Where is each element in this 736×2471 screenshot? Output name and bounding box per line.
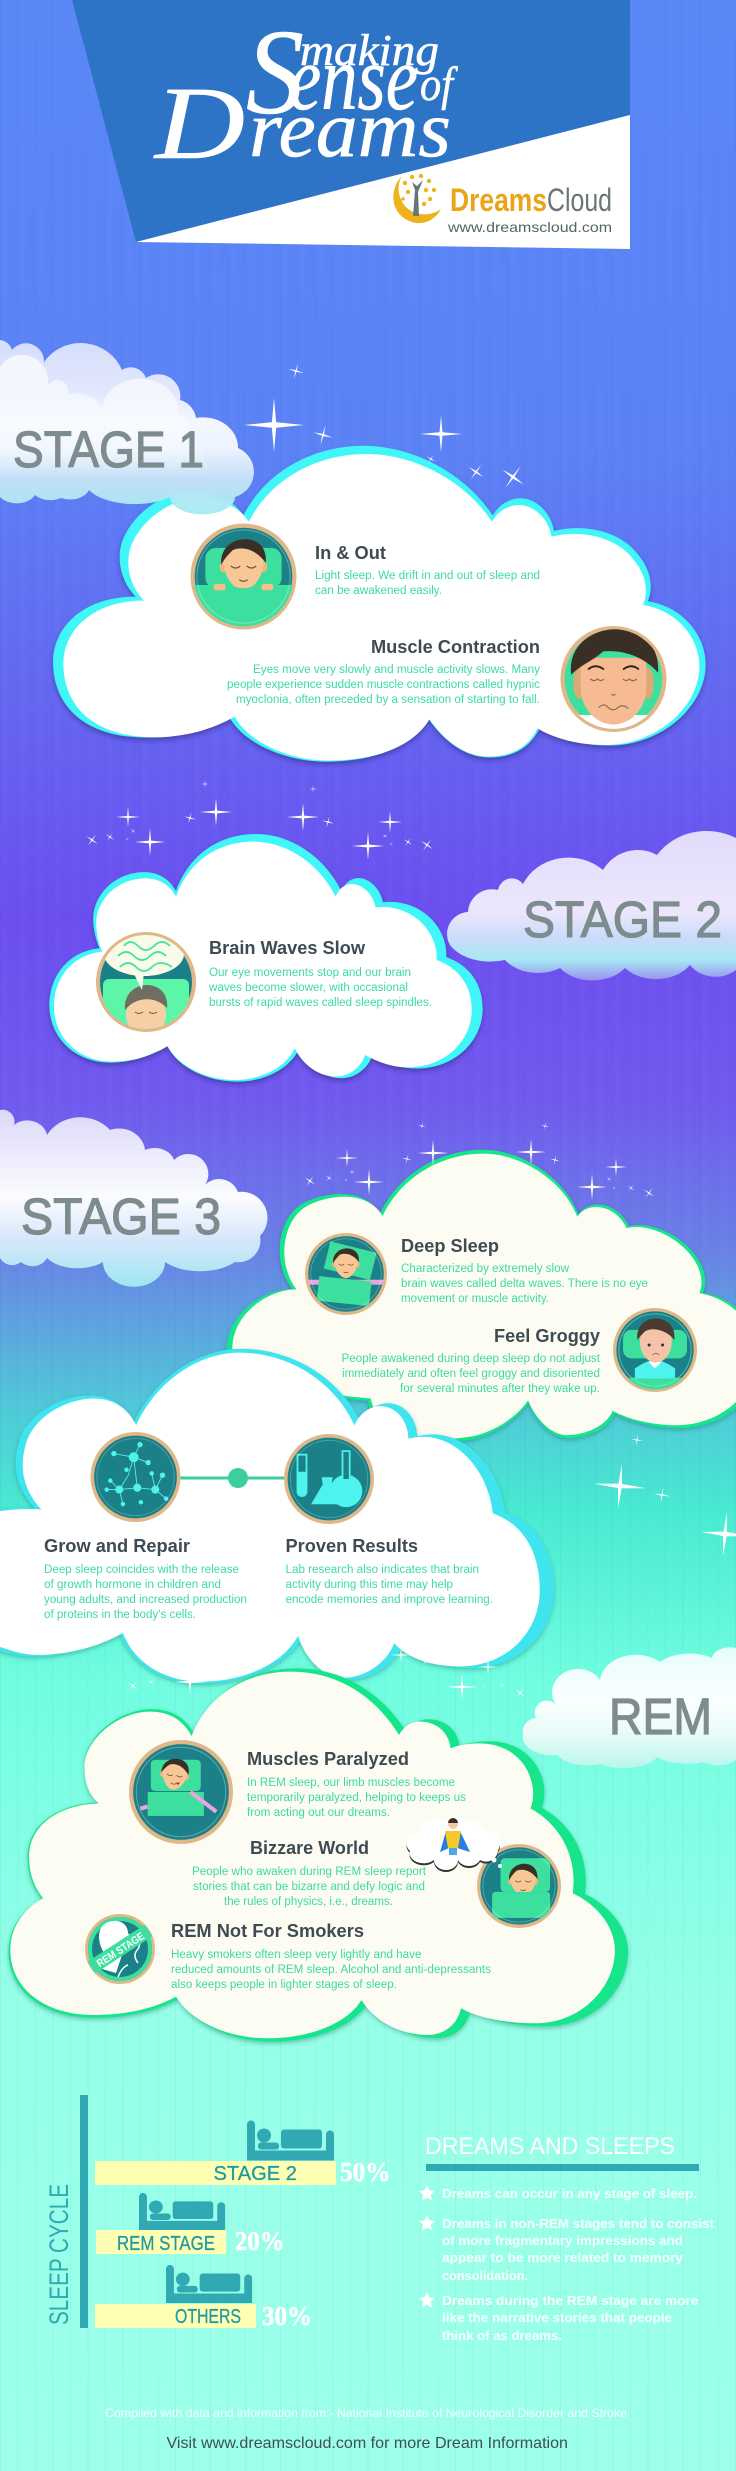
text: Muscle Contraction: myoclonia, often preceded by a sensation of starting to fall.: [236, 694, 540, 706]
text: REM Not For Smokers: Heavy smokers often sleep very lightly and have: [171, 1949, 422, 1961]
title: Making Sense of Dreams: making: [300, 26, 439, 75]
text: Feel Groggy: People awakened during deep sleep do not adjust: [342, 1353, 601, 1365]
chart: sleep cycle: [44, 2095, 390, 2331]
heading: STAGE 2: STAGE 2: [523, 891, 722, 948]
text: Bizzare World: stories that can be bizarre and defy logic and: [193, 1881, 425, 1893]
heading: Dreams and Sleeps: DREAMS AND SLEEPS: [425, 2133, 675, 2160]
text: Grow and Repair: Grow and Repair: [44, 1536, 190, 1556]
text: Proven Results: encode memories and improve learning.: [286, 1594, 493, 1606]
text: REM Not For Smokers: REM Not For Smokers: [171, 1921, 364, 1941]
title: Making Sense of Dreams: S: [246, 5, 304, 140]
text: Grow and Repair: of proteins in the body's cells.: [44, 1609, 196, 1621]
icon: lab flasks: [286, 1436, 372, 1522]
title: Making Sense of Dreams: of: [420, 58, 458, 111]
stars: sparkles right of stage 3 and above REM: [125, 1433, 736, 1701]
text: Deep Sleep: Deep Sleep: [401, 1236, 499, 1256]
bar: Others 30%: 30%: [262, 2301, 312, 2331]
bar: Stage 2 50%: STAGE 2: [214, 2163, 297, 2185]
bar: REM stage 20%: [96, 2193, 284, 2256]
text: In and Out: [315, 543, 540, 597]
title: Making Sense of Dreams: D: [153, 66, 245, 181]
title: Making Sense of Dreams: ense: [289, 27, 418, 129]
icon: deep sleeper: [305, 1235, 387, 1313]
text: In and Out: can be awakened easily.: [315, 585, 442, 597]
cloud label: stage 3: [0, 1110, 267, 1287]
text: Muscle Contraction: Muscle Contraction: [371, 637, 540, 657]
text: Brain Waves Slow: Our eye movements stop and our brain: [209, 967, 411, 979]
bullet 3: like the narrative stories that people: [442, 2310, 672, 2325]
bullet 2: of more fragmentary impressions and: [442, 2233, 683, 2248]
text: Muscle Contraction: people experience sudden muscle contractions called hypnic: [227, 679, 540, 691]
text: Feel Groggy: Feel Groggy: [494, 1326, 600, 1346]
bullet 3: [419, 2292, 698, 2343]
text: Muscles Paralyzed: from acting out our dreams.: [247, 1807, 390, 1819]
text: REM Not For Smokers: also keeps people in lighter stages of sleep.: [171, 1979, 397, 1991]
panel: stage 1 cloud: [53, 446, 706, 762]
bullet 1: Dreams can occur in any stage of sleep.: [442, 2186, 697, 2201]
text: Muscle Contraction: Eyes move very slowly and muscle activity slows. Many: [253, 664, 540, 676]
text: Grow and Repair: [44, 1536, 247, 1621]
heading: STAGE 1: STAGE 1: [13, 421, 204, 478]
bullet 2: consolidation.: [442, 2268, 528, 2283]
header banner: [72, 0, 630, 249]
icon: brain waves sleeper: [98, 932, 194, 1037]
icon: groggy person: [613, 1310, 697, 1391]
icon: REM stage smoker badge: REM STAGE: [95, 1931, 147, 1970]
axis label: SLEEP CYCLE: SLEEP CYCLE: [44, 2184, 74, 2325]
cloud label: stage 1: [0, 340, 254, 514]
logo: DreamsCloud: [393, 174, 612, 235]
text: Muscles Paralyzed: In REM sleep, our limb muscles become: [247, 1777, 455, 1789]
text: Deep Sleep: movement or muscle activity.: [401, 1293, 549, 1305]
bar: Stage 2 50%: [95, 2120, 390, 2187]
text: Feel Groggy: for several minutes after they wake up.: [400, 1383, 600, 1395]
text: Muscles Paralyzed: [247, 1749, 466, 1819]
text: Feel Groggy: [342, 1326, 601, 1395]
text: Grow and Repair: of growth hormone in children and: [44, 1579, 221, 1591]
text: Brain Waves Slow: Brain Waves Slow: [209, 938, 366, 958]
logo: DreamsCloud: Cloud: [547, 182, 612, 218]
text: REM Not For Smokers: [171, 1921, 491, 1991]
icon: molecules: [92, 1434, 179, 1520]
bullet 2: Dreams in non-REM stages tend to consist: [442, 2216, 715, 2231]
icon: dream thought bubble with hero: [406, 1816, 502, 1872]
text: Brain Waves Slow: bursts of rapid waves called sleep spindles.: [209, 997, 432, 1009]
bullet 3: think of as dreams.: [442, 2328, 562, 2343]
logo: DreamsCloud: www.dreamscloud.com: [447, 219, 612, 235]
panel: stage 3 deep sleep cloud: [227, 1150, 736, 1442]
text: Deep Sleep: Characterized by extremely slow: [401, 1263, 570, 1275]
text: REM Not For Smokers: reduced amounts of REM sleep. Alcohol and anti-depressants: [171, 1964, 491, 1976]
text: In and Out: In & Out: [315, 543, 386, 563]
text: Proven Results: Lab research also indicates that brain: [286, 1564, 479, 1576]
connector line: [179, 1468, 285, 1488]
title: Making Sense of Dreams: [153, 5, 458, 181]
title: Making Sense of Dreams: reams: [249, 86, 451, 174]
text: Brain Waves Slow: waves become slower, with occasional: [208, 982, 408, 994]
icon: Muscle Contraction face: [560, 628, 666, 730]
footer: visit link: Visit www.dreamscloud.com for more Dream Information: [166, 2435, 568, 2452]
text: Feel Groggy: immediately and often feel groggy and disoriented: [342, 1368, 600, 1380]
text: Grow and Repair: Deep sleep coincides with the release: [44, 1564, 239, 1576]
stars: sparkles near stage 1: [244, 361, 531, 495]
icon: In and Out sleeper: [190, 526, 296, 630]
bar: Stage 2 50%: 50%: [340, 2157, 390, 2187]
heading: REM: REM: [609, 1688, 712, 1745]
bar: REM stage 20%: REM STAGE: [117, 2233, 215, 2255]
text: Grow and Repair: young adults, and increased production: [44, 1594, 247, 1606]
bar: REM stage 20%: 20%: [235, 2226, 284, 2256]
text: Deep Sleep: [401, 1236, 648, 1305]
bullet 3: Dreams during the REM stage are more: [442, 2293, 698, 2308]
icon: paralyzed sleeper: [131, 1742, 231, 1842]
cloud label: stage 2: [447, 831, 736, 981]
text: Proven Results: Proven Results: [286, 1536, 418, 1556]
text: Bizzare World: the rules of physics, i.e., dreams.: [224, 1896, 393, 1908]
logo: DreamsCloud: Dreams: [450, 182, 547, 218]
bar: Others 30%: [95, 2265, 312, 2331]
text: Brain Waves Slow: [208, 938, 432, 1009]
heading: STAGE 3: STAGE 3: [21, 1188, 221, 1245]
footer: sources: Compiled with data and information from:- National Institute of Neurological Disorder and Stroke: [105, 2406, 627, 2420]
text: Proven Results: [286, 1536, 493, 1606]
bar: Others 30%: OTHERS: [175, 2306, 241, 2328]
bullet 2: [419, 2215, 715, 2283]
text: Bizzare World: People who awaken during REM sleep report: [192, 1866, 427, 1878]
panel: REM cloud: [8, 1668, 628, 2042]
text: Muscles Paralyzed: temporarily paralyzed, helping to keeps us: [247, 1792, 466, 1804]
icon: dreaming sleeper: [479, 1846, 559, 1926]
bullet 2: appear to be more related to memory: [442, 2250, 684, 2265]
text: Proven Results: activity during this time may help: [286, 1579, 453, 1591]
stars: sparkles above stage 2: [82, 780, 437, 860]
panel: stage 2 cloud: [49, 834, 483, 1082]
stars: sparkles above stage 3: [302, 1121, 657, 1201]
text: Muscles Paralyzed: Muscles Paralyzed: [247, 1749, 409, 1769]
panel: dreams and sleeps: [419, 2133, 715, 2343]
text: Muscle Contraction: [227, 637, 540, 706]
icon: REM stage smoker badge: [86, 1916, 154, 1982]
cloud label: REM: [523, 1647, 736, 1768]
text: Deep Sleep: brain waves called delta waves. There is no eye: [401, 1278, 648, 1290]
panel: grow and proven cloud: [0, 1349, 554, 1684]
text: Bizzare World: Bizzare World: [250, 1838, 369, 1858]
text: Bizzare World: [192, 1838, 427, 1908]
text: In and Out: Light sleep. We drift in and out of sleep and: [315, 570, 540, 582]
